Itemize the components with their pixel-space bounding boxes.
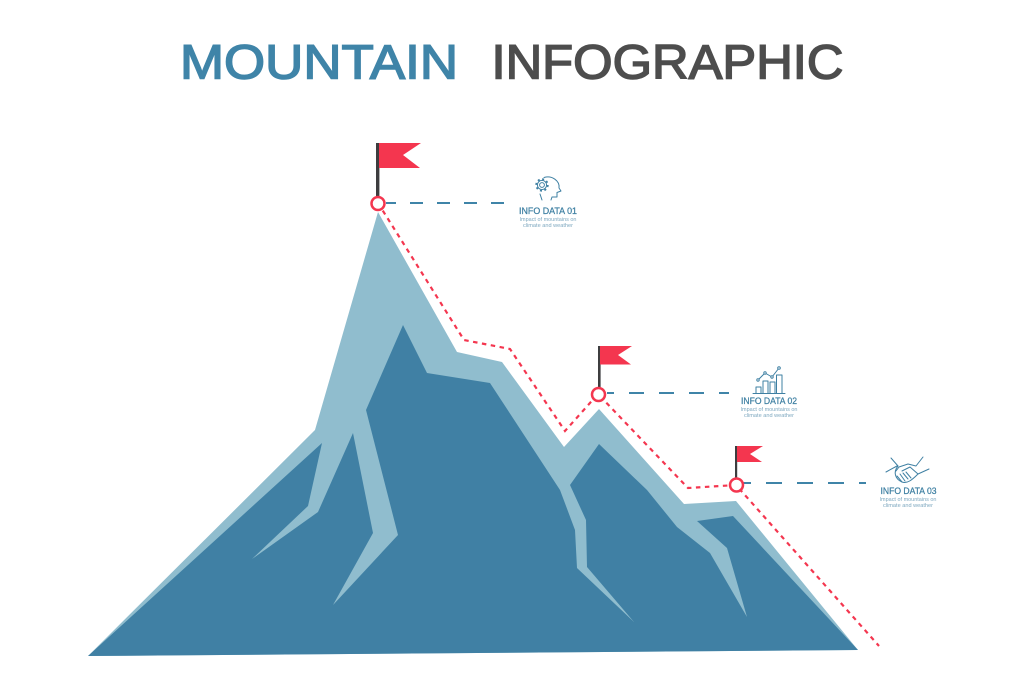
info block 02 [740,367,798,419]
icon: handshake [886,457,929,483]
label 01: INFO DATA 01 [519,206,577,216]
red dotted route [378,203,879,646]
icon: bar chart with trend line [753,367,785,394]
icon: head with gear [536,177,561,200]
description 03: Impact of mountains on [880,497,936,503]
leader line 02 [607,392,729,394]
label 02: INFO DATA 02 [741,396,797,406]
label 03: INFO DATA 03 [880,486,936,496]
flag 3 [730,446,763,492]
description 02 [740,407,798,419]
flag 2 [592,346,632,401]
description 02: climate and weather [744,413,794,419]
description 01: climate and weather [523,223,573,229]
flag 1 [372,143,421,210]
mountain light outline [88,212,858,656]
title [180,35,844,89]
description 02: Impact of mountains on [740,407,798,413]
info block 03 [880,457,936,509]
title: MOUNTAIN [180,35,458,89]
description 01 [520,217,576,229]
leader line 01 [386,202,505,204]
info block 01 [519,177,577,229]
leader line 03 [743,482,866,484]
mountain dark shading [88,325,858,656]
mountain [88,212,858,656]
description 01: Impact of mountains on [520,217,576,223]
title: INFOGRAPHIC [492,35,844,89]
description 03: climate and weather [883,503,933,509]
description 03 [880,497,936,509]
